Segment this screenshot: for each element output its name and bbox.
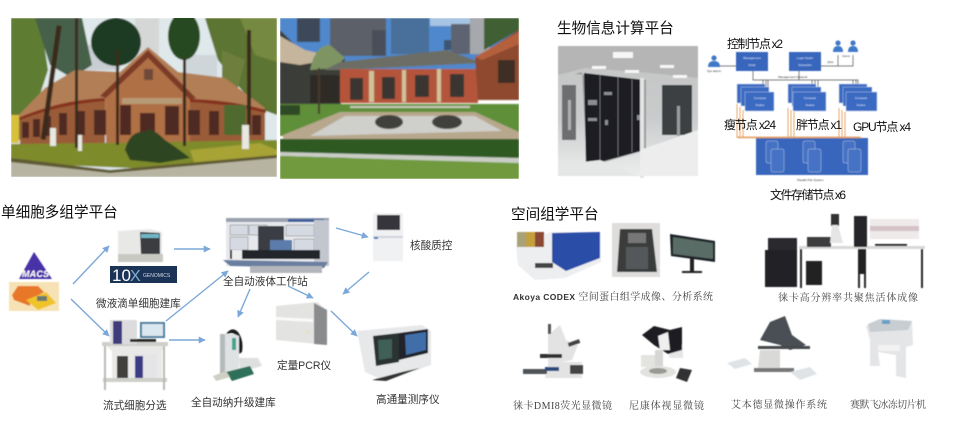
icon: Leica DMI8 microscope — [523, 324, 583, 378]
photo: brick heritage building with trees — [11, 12, 277, 177]
diagram: HPC cluster network: 瘦节点 x24 — [724, 117, 776, 132]
diagram: HPC cluster network: Compute — [754, 96, 766, 100]
logo: 10x Genomics — [110, 266, 177, 285]
logo: 10x Genomics: GENOMICS — [143, 273, 171, 279]
label: sequencer: 高通量测序仪 — [376, 393, 440, 406]
label: Leica DMI8: 徕卡DMI8荧光显微镜 — [513, 399, 612, 412]
diagram: HPC cluster network: Compute — [855, 96, 867, 100]
label: nanolitre library: 全自动纳升级建库 — [191, 396, 276, 409]
label: qPCR: 定量PCR仪 — [277, 359, 332, 372]
arrows: workflow connectors — [71, 228, 369, 340]
label: Nikon stereo: 尼康体视显微镜 — [629, 399, 704, 412]
diagram: HPC cluster network: GPU节点 x4 — [853, 120, 911, 134]
icon: Akoya CODEX system — [516, 232, 601, 280]
label: Leica confocal: 徕卡高分辨率共聚焦活体成像 — [778, 291, 918, 304]
diagram: HPC cluster network — [707, 37, 911, 202]
label: liquid workstation: 全自动液体工作站 — [223, 275, 308, 288]
diagram: HPC cluster network: Nodes — [756, 103, 765, 107]
label: flow cell sorting: 流式细胞分选 — [103, 399, 167, 412]
label: nucleic acid QC: 核酸质控 — [410, 239, 453, 252]
heading: spatial omics platform: 空间组学平台 — [511, 206, 599, 223]
diagram: HPC cluster network: 胖节点 x1 — [796, 118, 842, 132]
logo: 10x Genomics: 10 — [112, 266, 131, 285]
icon: analysis monitor — [670, 234, 715, 273]
diagram: HPC cluster network: Compute — [804, 96, 816, 100]
photo: server room behind glass — [558, 46, 698, 178]
icon: qPCR instrument — [276, 302, 327, 345]
icon: high-throughput sequencer — [357, 325, 431, 381]
label: Thermo cryostat: 赛默飞冰冻切片机 — [850, 398, 926, 411]
icon: MACS logo with orange instrument: MACS — [22, 269, 49, 279]
diagram: HPC cluster network: Jobs — [827, 60, 834, 64]
diagram: HPC cluster network: Nodes — [806, 103, 815, 107]
icon: liquid handling workstation — [223, 218, 329, 273]
diagram: HPC cluster network: Management Network — [778, 75, 808, 79]
diagram: HPC cluster network: 文件存储节点 x6 — [770, 187, 846, 202]
heading: bioinformatics platform: 生物信息计算平台 — [557, 20, 674, 37]
diagram: HPC cluster network: Nodes — [857, 103, 866, 107]
diagram: HPC cluster network: Node — [748, 63, 756, 67]
icon: nanolitre library robot — [213, 329, 262, 381]
diagram: HPC cluster network: Management — [743, 56, 761, 60]
icon: Nikon stereo microscope — [640, 326, 692, 382]
icon: nucleic acid QC instrument — [373, 213, 403, 261]
diagram: HPC cluster network: Users — [842, 54, 850, 58]
icon: Leica confocal live imaging rig — [765, 214, 925, 288]
diagram: HPC cluster network: 控制节点 x2 — [727, 37, 783, 51]
diagram: HPC cluster network: Sys admin — [707, 69, 721, 73]
icon: MACS logo with orange instrument — [9, 252, 59, 311]
icon: Thermo cryostat — [866, 319, 913, 378]
label: droplet library: 微液滴单细胞建库 — [96, 297, 181, 310]
diagram: HPC cluster network: Login Node/ — [797, 56, 813, 60]
heading: single-cell multi-omics platform: 单细胞多组学平台 — [1, 204, 118, 221]
label: Akoya CODEX: Akoya CODEX 空间蛋白组学成像、分析系统 — [513, 290, 713, 303]
diagram: HPC cluster network: Scheduler — [798, 63, 812, 67]
logo: 10x Genomics: X — [130, 268, 141, 285]
icon: Eppendorf micromanipulator — [727, 316, 817, 380]
icon: flow cytometer cart — [102, 320, 168, 390]
label: Eppendorf: 艾本德显微操作系统 — [731, 398, 827, 411]
photo: courtyard with grey roof building — [280, 18, 519, 179]
diagram: HPC cluster network: Parallel File System — [797, 178, 824, 182]
icon: CODEX microscope scanner — [612, 223, 660, 277]
icon: 10x single-cell instrument — [118, 229, 163, 262]
